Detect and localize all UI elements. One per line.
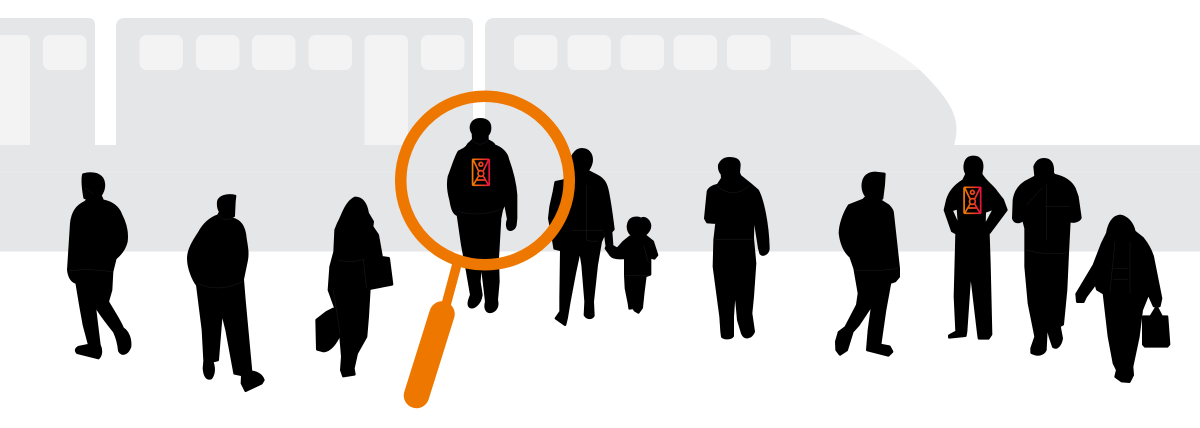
person: woman carrying two bags: [317, 198, 392, 376]
person: hooded woman carrying bag: [1077, 216, 1169, 382]
train car: nose: [485, 18, 956, 145]
person: highlighted man in hoodie with badge: [448, 119, 516, 312]
person: man with hands in pockets: [188, 195, 263, 391]
person: staff with hands on hips and badge: [945, 157, 1006, 338]
handle grip: [416, 314, 442, 396]
person: adult holding child's hand: [549, 149, 613, 325]
lens ring: [401, 96, 569, 265]
train windows: [0, 35, 920, 145]
badge on highlighted man: [473, 159, 489, 185]
badge on staff member: [964, 187, 981, 213]
train car: middle: [116, 18, 473, 145]
platform band: [0, 145, 1200, 252]
person: man in hoodie walking away: [705, 158, 768, 338]
person: man walking right side view: [836, 173, 899, 355]
handle neck: [446, 264, 457, 305]
person: large man looking at phone: [1013, 159, 1080, 354]
train car: rear: [0, 18, 95, 145]
person: child: [606, 218, 657, 312]
train: [0, 18, 1200, 252]
person: walking left, side view: [68, 174, 130, 358]
magnifying glass: [401, 96, 569, 395]
